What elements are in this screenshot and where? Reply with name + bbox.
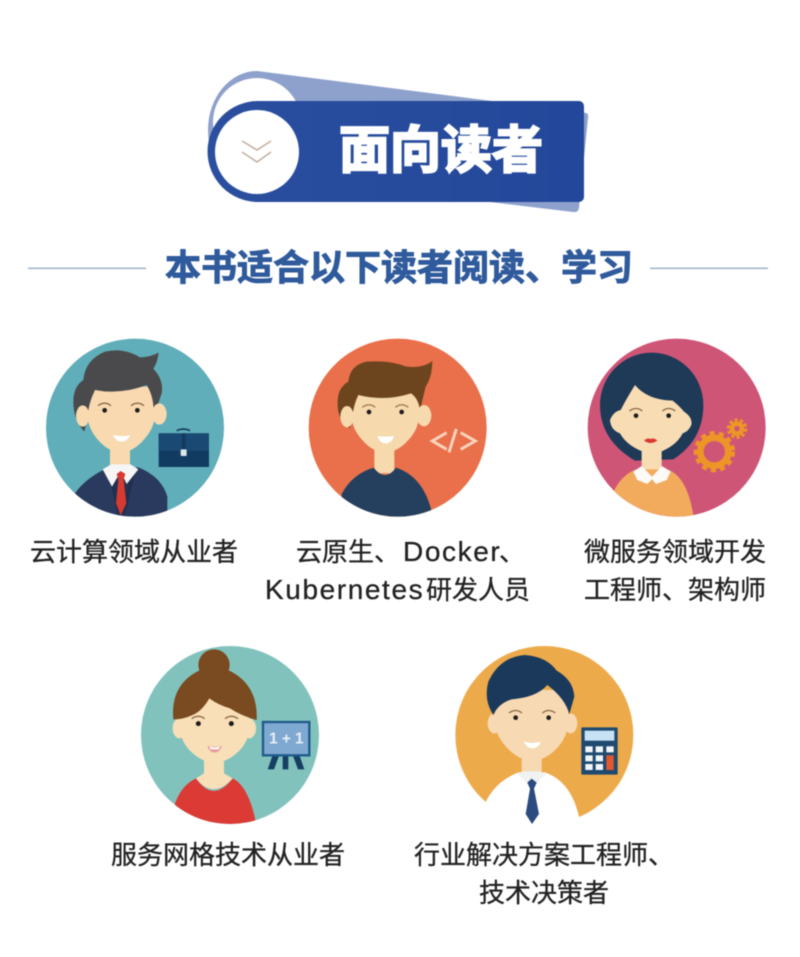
caption: cloud native: Docker: [403, 536, 501, 567]
icon: blackboard: 1 + 1: [269, 730, 304, 747]
caption: cloud native: 研发人员: [426, 575, 530, 605]
icon: double chevron: [242, 141, 271, 162]
icon: code brackets: [432, 429, 475, 452]
avatar: solutions engineer: [455, 646, 633, 832]
icon: blackboard: [263, 722, 309, 769]
caption: cloud native: 、: [499, 537, 525, 567]
avatar: service mesh practitioner: [141, 646, 319, 830]
caption: microservices: [584, 537, 766, 605]
caption: cloud native: [265, 536, 530, 605]
avatar: microservices engineer: [588, 339, 766, 520]
caption: service mesh: 服务网格技术从业者: [111, 840, 345, 870]
caption: microservices: 微服务领域开发: [584, 537, 766, 567]
icon: briefcase: [159, 429, 209, 467]
caption: cloud computing: 云计算领域从业者: [30, 537, 238, 567]
caption: cloud native: Kubernetes: [265, 574, 424, 605]
subtitle with side rules: 本书适合以下读者阅读、学习: [165, 247, 633, 288]
caption: cloud native: 云原生、: [296, 537, 400, 567]
banner heading: 面向读者: [339, 122, 543, 179]
avatar: cloud computing professional: [46, 339, 224, 520]
caption: solutions engineer: 技术决策者: [479, 878, 609, 908]
caption: solutions engineer: 行业解决方案工程师、: [414, 840, 674, 870]
caption: microservices: 工程师、架构师: [584, 575, 766, 605]
avatar: cloud native developer: [309, 339, 487, 520]
icon: gears: [696, 420, 745, 470]
icon: calculator: [581, 727, 618, 775]
title banner: [208, 71, 588, 212]
caption: solutions engineer: [414, 840, 674, 908]
